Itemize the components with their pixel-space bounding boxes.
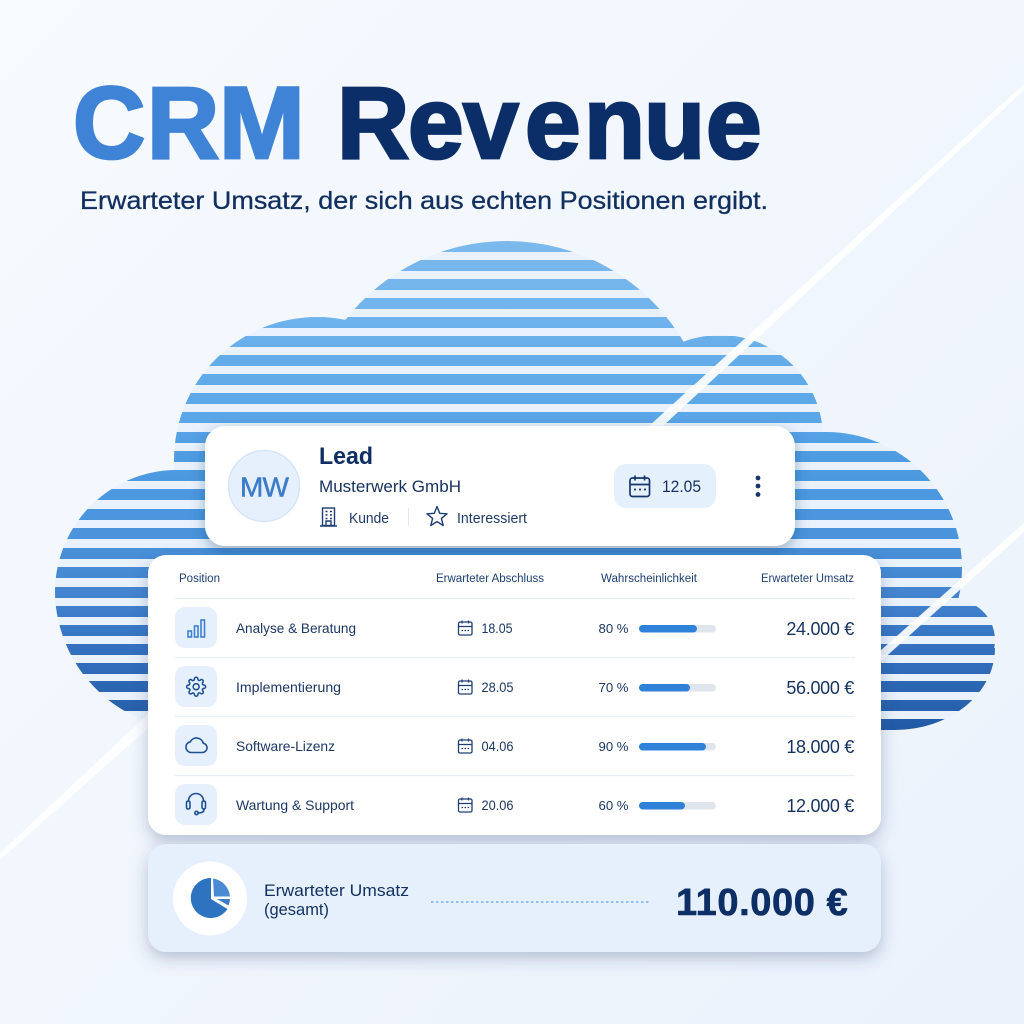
table header: Erwarteter Umsatz [761, 573, 854, 585]
subtitle: Erwarteter Umsatz, der sich aus echten Positionen ergibt. [80, 187, 768, 215]
row: Implementierung [175, 666, 854, 707]
company name: Musterwerk GmbH [319, 477, 461, 496]
title [73, 65, 762, 180]
total value: 110.000 € [676, 882, 848, 924]
row: Implementierung: 28.05 [482, 680, 514, 695]
title: CR [73, 67, 219, 180]
icon: cloud [186, 738, 207, 752]
date pill [614, 464, 716, 508]
row: Software-Lizenz: 18.000 € [786, 737, 854, 757]
title: Revenue [337, 67, 762, 180]
row: Analyse & Beratung: Analyse & Beratung [236, 620, 356, 636]
icon: headset [186, 794, 206, 815]
total label: Erwarteter Umsatz [264, 882, 409, 900]
striped cloud [40, 236, 1010, 736]
table header: Position [179, 573, 220, 585]
avatar: MW [240, 472, 290, 502]
date pill: 12.05 [662, 478, 701, 496]
table header [179, 573, 854, 585]
total label: (gesamt) [264, 901, 329, 919]
total label [264, 882, 409, 919]
row: Implementierung: 56.000 € [786, 678, 854, 698]
row: Software-Lizenz [175, 725, 854, 766]
row: Wartung & Support: 20.06 [482, 798, 514, 813]
row: Software-Lizenz: Software-Lizenz [236, 738, 335, 754]
table header: Wahrscheinlichkeit [601, 573, 698, 585]
row: Analyse & Beratung [175, 607, 854, 648]
icon: more menu [756, 476, 760, 497]
row: Software-Lizenz: 90 % [598, 739, 629, 754]
label: Kunde: Kunde [349, 511, 389, 527]
icon: building [320, 508, 337, 526]
row: Analyse & Beratung: 18.05 [482, 621, 512, 636]
icon: gear [187, 677, 206, 696]
avatar [228, 450, 300, 522]
row: Software-Lizenz: 04.06 [482, 739, 514, 754]
row: Implementierung: Implementierung [236, 679, 341, 695]
row: Wartung & Support: 12.000 € [786, 796, 854, 816]
row: Wartung & Support: 60 % [598, 798, 629, 813]
lead heading: Lead [319, 443, 373, 470]
row: Implementierung: 70 % [598, 680, 629, 695]
title: M [219, 65, 305, 180]
row: Wartung & Support: Wartung & Support [236, 797, 354, 813]
icon: star [427, 506, 447, 526]
icon: bar chart [188, 620, 204, 637]
label: Interessiert: Interessiert [457, 511, 527, 527]
icon: pie chart [173, 862, 247, 936]
table header: Erwarteter Abschluss [436, 573, 544, 585]
panel: positions table [148, 555, 881, 835]
row: Wartung & Support [175, 784, 854, 825]
panel: lead card [205, 426, 795, 546]
row: Analyse & Beratung: 80 % [598, 621, 629, 636]
panel: total summary [148, 844, 881, 952]
light streaks [0, 84, 1024, 860]
row: Analyse & Beratung: 24.000 € [786, 619, 854, 639]
